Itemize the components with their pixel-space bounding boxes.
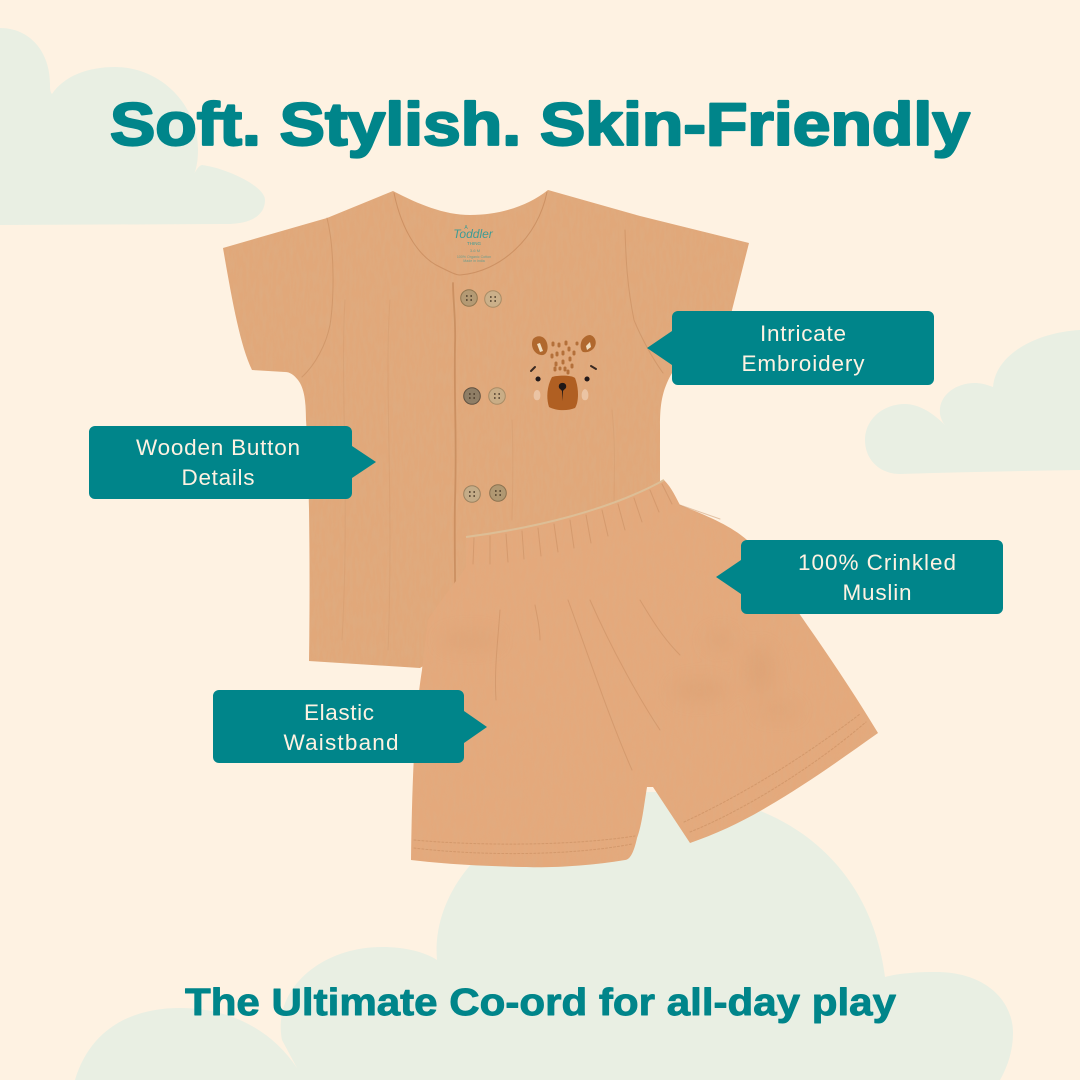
callout text line 2: Details bbox=[182, 465, 254, 490]
callout box bbox=[647, 311, 934, 385]
collar and placket seams bbox=[302, 192, 663, 665]
tagline: The Ultimate Co-ord for all-day play bbox=[185, 982, 896, 1024]
shirt texture bbox=[223, 190, 749, 668]
callout text: Elastic bbox=[304, 700, 374, 725]
bear snout bbox=[547, 376, 578, 410]
neck label: 100% Organic Cotton bbox=[457, 255, 491, 259]
shorts hems bbox=[414, 714, 866, 854]
callout text line 2: Embroidery bbox=[742, 351, 865, 376]
bear nose bbox=[559, 383, 566, 401]
callout text line 2: Waistband bbox=[284, 730, 398, 755]
shorts bbox=[411, 480, 878, 867]
neck label: 3-6 M bbox=[470, 248, 480, 253]
shorts texture bbox=[411, 480, 878, 867]
callout box bbox=[89, 426, 376, 499]
bear forehead spots bbox=[552, 342, 577, 373]
bear eye dots bbox=[538, 376, 587, 382]
neck label: Made in India bbox=[463, 259, 485, 263]
title: Soft. Stylish. Skin-Friendly bbox=[110, 91, 971, 158]
callout text: Wooden Button bbox=[136, 435, 300, 460]
callout: 100% crinkled muslin bbox=[716, 540, 1003, 614]
cloud: right bbox=[865, 330, 1080, 474]
wooden buttons bbox=[461, 290, 506, 502]
callout text: Intricate bbox=[760, 321, 846, 346]
shirt body bbox=[223, 190, 749, 668]
neck label: A bbox=[464, 225, 468, 231]
shirt bbox=[223, 190, 749, 668]
bear inner ears bbox=[537, 342, 591, 352]
bear cheeks bbox=[534, 389, 588, 400]
neck label: THING bbox=[467, 241, 481, 246]
neck label bbox=[453, 225, 494, 263]
shorts shading bbox=[440, 632, 800, 716]
callout box bbox=[213, 690, 487, 763]
cloud: bottom bbox=[75, 792, 1013, 1080]
cloud: top left bbox=[0, 28, 265, 225]
callout box bbox=[716, 540, 1003, 614]
callout: elastic waistband bbox=[213, 690, 487, 763]
bear ears bbox=[532, 335, 596, 355]
callout: wooden button details bbox=[89, 426, 376, 499]
bear brows bbox=[531, 366, 596, 371]
neck label: Toddler bbox=[453, 227, 494, 241]
callout text: 100% Crinkled bbox=[798, 550, 956, 575]
shorts folds bbox=[495, 600, 680, 770]
waistband gathers bbox=[473, 484, 720, 564]
bear embroidery bbox=[531, 335, 596, 410]
waistband top edge bbox=[466, 480, 664, 537]
callout text line 2: Muslin bbox=[842, 580, 912, 605]
callout: intricate embroidery bbox=[647, 311, 934, 385]
shorts body bbox=[411, 480, 878, 867]
